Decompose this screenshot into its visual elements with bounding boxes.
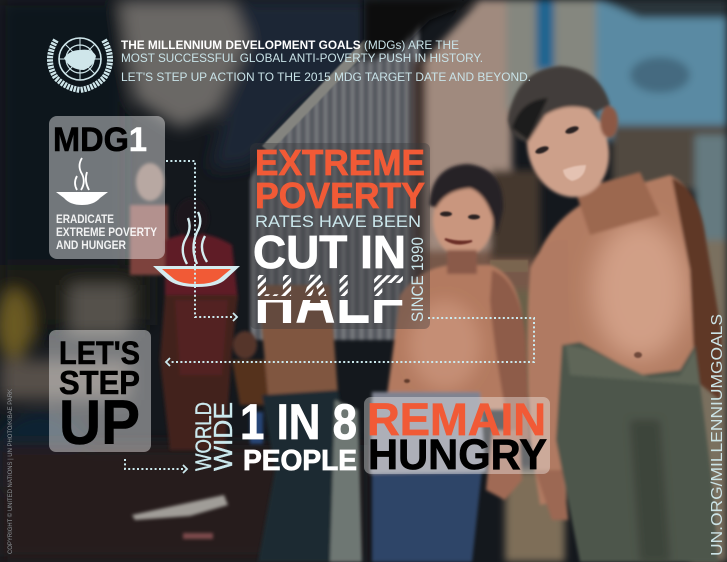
text: rates have been: RATES HAVE BEEN: [255, 212, 421, 231]
text: copyright: COPYRIGHT © UNITED NATIONS | UN PHOTO/KIBAE PARK: [7, 389, 14, 554]
text: worldwide vertical: [191, 402, 238, 471]
header text: LET'S STEP UP ACTION TO THE 2015 MDG TARGET DATE AND BEYOND.: [121, 70, 531, 84]
text: website url: UN.ORG/MILLENNIUMGOALS: [709, 314, 726, 556]
text: remain: REMAIN: [367, 394, 546, 445]
heading: extreme poverty: [255, 142, 425, 216]
corrugated wall: [250, 20, 420, 340]
header text: THE MILLENNIUM DEVELOPMENT GOALS (MDGs) ARE THE: [121, 38, 459, 52]
text: worldwide vertical: WORLD: [191, 402, 216, 471]
panel: extreme poverty statement: [250, 142, 430, 338]
MDG1 description: ERADICATE: [56, 212, 114, 226]
text: half, striped upper and solid lower: HALF: [254, 260, 405, 338]
text: worldwide vertical: WIDE: [208, 402, 238, 471]
heading: extreme poverty: EXTREME: [255, 142, 425, 183]
panel: remain hungry: [364, 394, 550, 479]
large boy: [508, 66, 722, 562]
MDG1 description: [56, 212, 157, 252]
text: hungry: HUNGRY: [368, 431, 547, 479]
arrow: dotted step up to world wide: [125, 459, 187, 473]
text: let's step up: STEP: [59, 364, 140, 401]
MDG1 description: EXTREME POVERTY: [56, 225, 157, 239]
text: cut in: CUT IN: [253, 226, 406, 278]
header text: MOST SUCCESSFUL GLOBAL ANTI-POVERTY PUSH IN HISTORY.: [121, 51, 483, 65]
MDG1 description: AND HUNGER: [56, 238, 126, 252]
text: 1 in 8 people: [240, 394, 357, 477]
blurred people in the alley: [130, 163, 362, 562]
icon: large bowl with steam: [153, 212, 240, 287]
text: 1 in 8 people: 1 IN 8: [240, 394, 357, 450]
icon: soup bowl: [56, 158, 108, 205]
arrow: dotted half to let's step up: [166, 318, 534, 366]
text: let's step up: [59, 335, 140, 458]
text: since 1990: SINCE 1990: [408, 237, 427, 322]
text: 1 in 8 people: PEOPLE: [243, 445, 357, 477]
text: let's step up: LET'S: [59, 335, 140, 371]
arrow: dotted MDG1 to half: [166, 161, 237, 321]
header logo: United Nations emblem: [50, 38, 110, 90]
MDG1 heading: MDG1: [53, 121, 147, 159]
text: let's step up: UP: [59, 388, 140, 458]
header text: [121, 38, 531, 84]
small boy: [370, 164, 530, 562]
heading: extreme poverty: POVERTY: [255, 175, 425, 216]
panel: let's step up: [49, 330, 151, 458]
panel: MDG1: [49, 116, 165, 259]
